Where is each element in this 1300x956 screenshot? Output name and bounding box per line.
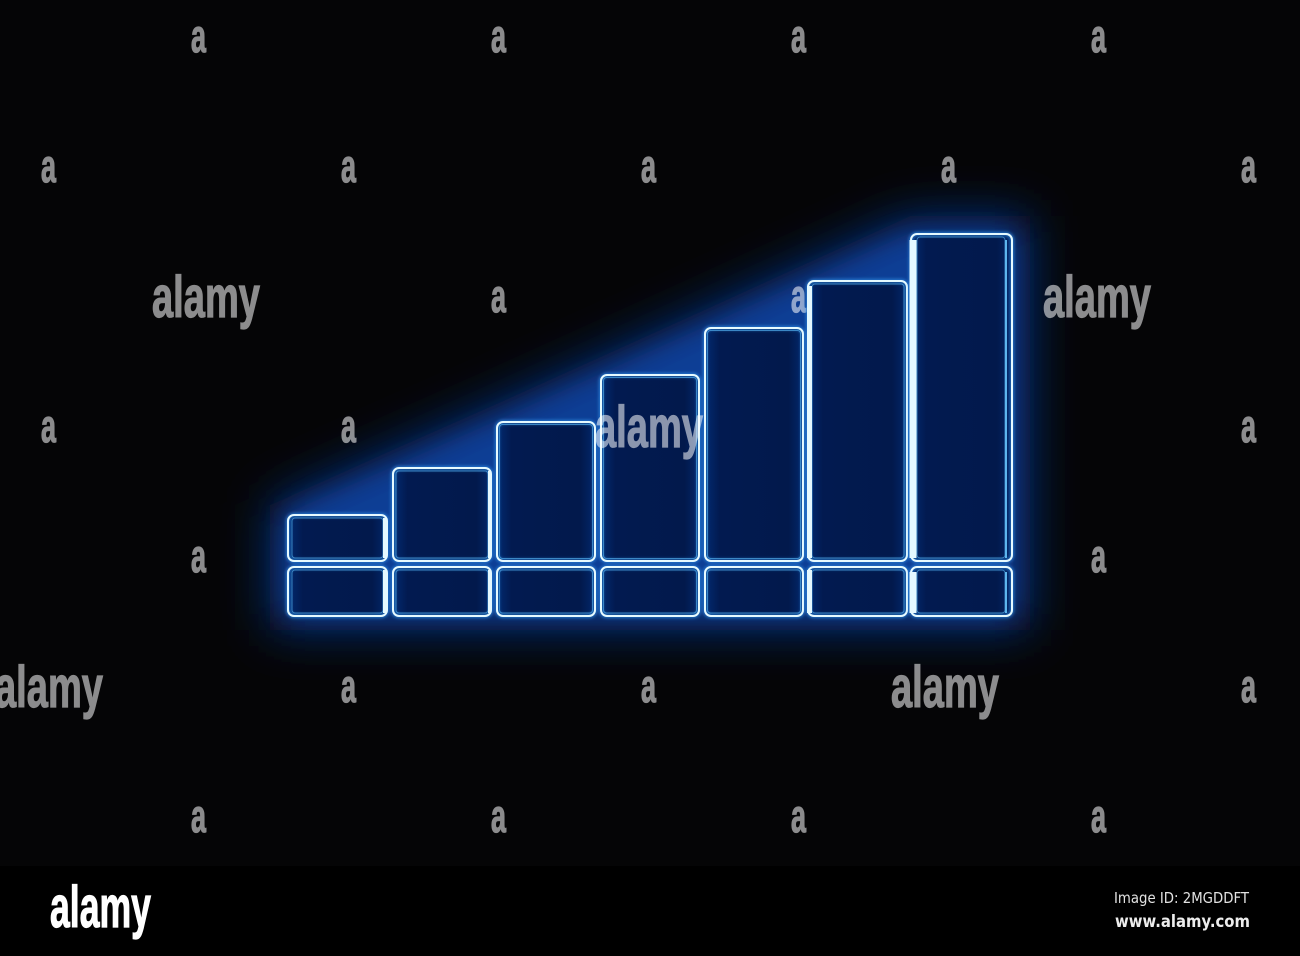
- small watermark letters behind the chart: a: [1241, 660, 1256, 712]
- footer image id: Image ID: 2MGDDFT: [1114, 889, 1250, 907]
- base block 2: [393, 567, 492, 616]
- large watermark words: alamy: [891, 655, 999, 720]
- large watermark words: alamy: [595, 395, 703, 460]
- bar 4: [601, 375, 699, 561]
- large watermark words: alamy: [1043, 265, 1151, 330]
- blue glow behind chart: [270, 216, 1030, 630]
- small watermark letters behind the chart: a: [1241, 400, 1256, 452]
- small watermark letters behind the chart: a: [191, 790, 206, 842]
- small watermark letters behind the chart: a: [491, 10, 506, 62]
- bar 1: [288, 515, 388, 561]
- base block 3: [497, 567, 595, 616]
- large watermark words: [0, 265, 1151, 720]
- base row of blocks: [288, 567, 1012, 616]
- small watermark letters behind the chart: a: [41, 140, 56, 192]
- base block 5: [705, 567, 803, 616]
- small watermark letters behind the chart: a: [1091, 10, 1106, 62]
- small watermark letters behind the chart: a: [941, 140, 956, 192]
- small watermark letters behind the chart: a: [791, 270, 806, 322]
- small watermark letters behind the chart: a: [791, 10, 806, 62]
- bar 3: [497, 422, 595, 561]
- base block 7: [910, 567, 1012, 616]
- small watermark letters behind the chart: a: [191, 10, 206, 62]
- small watermark letters behind the chart: a: [341, 140, 356, 192]
- small watermark letters behind the chart: a: [191, 530, 206, 582]
- base block 6: [807, 567, 907, 616]
- base block 1: [288, 567, 388, 616]
- base block 4: [601, 567, 699, 616]
- small watermark letters behind the chart: a: [641, 140, 656, 192]
- small watermark letters behind the chart: a: [341, 400, 356, 452]
- bar 7: [910, 234, 1012, 561]
- small watermark letters behind the chart: a: [1091, 790, 1106, 842]
- footer url: www.alamy.com: [1115, 912, 1250, 932]
- bar 2: [393, 468, 492, 561]
- bar 6: [807, 281, 907, 561]
- small watermark letters behind the chart: a: [41, 400, 56, 452]
- bar chart: neon rising bars: [288, 234, 1012, 616]
- small watermark letters behind the chart: a: [1241, 140, 1256, 192]
- small watermark letters behind the chart: a: [1091, 530, 1106, 582]
- footer logo: alamy: [50, 875, 151, 940]
- small watermark letters behind the chart: a: [641, 660, 656, 712]
- small watermark letters behind the chart: a: [791, 790, 806, 842]
- bar 5: [705, 328, 803, 561]
- small watermark letters behind the chart: a: [341, 660, 356, 712]
- small watermark letters behind the chart: a: [491, 270, 506, 322]
- small watermark letters behind the chart: a: [491, 790, 506, 842]
- footer band: [0, 866, 1300, 956]
- large watermark words: alamy: [152, 265, 260, 330]
